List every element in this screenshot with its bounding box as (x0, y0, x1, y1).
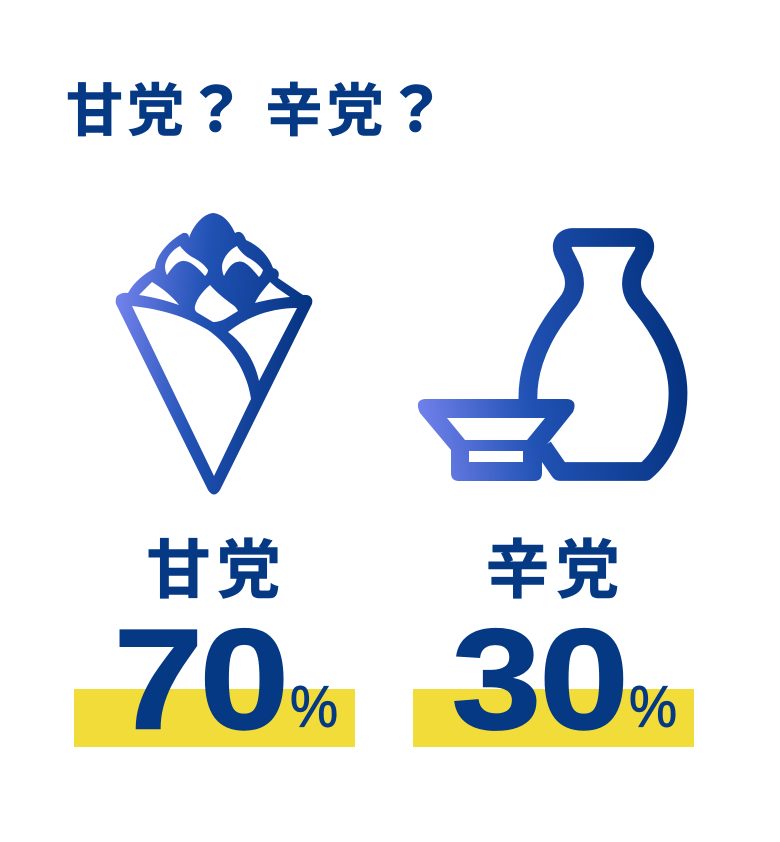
panel: dry result (413, 534, 694, 759)
title: ？ (186, 77, 246, 144)
percent sign: % (290, 674, 338, 739)
yellow bar (74, 689, 355, 747)
panel: sweet result (74, 534, 355, 759)
percent sign: % (629, 674, 677, 739)
value: 30: 30 (452, 600, 629, 759)
sake cup (418, 399, 575, 481)
icon: crepe (116, 213, 312, 494)
label: dry: 辛党 (486, 534, 626, 606)
yellow bar (413, 689, 694, 747)
title (66, 77, 446, 144)
sake bottle (528, 238, 678, 472)
title: ？ (386, 77, 446, 144)
icon: sake bottle and cup (418, 238, 678, 481)
label: sweet: 甘党 (146, 534, 286, 606)
title: 甘党 (66, 80, 188, 144)
value: 70: 70 (114, 600, 289, 759)
title: 辛党 (266, 80, 388, 144)
